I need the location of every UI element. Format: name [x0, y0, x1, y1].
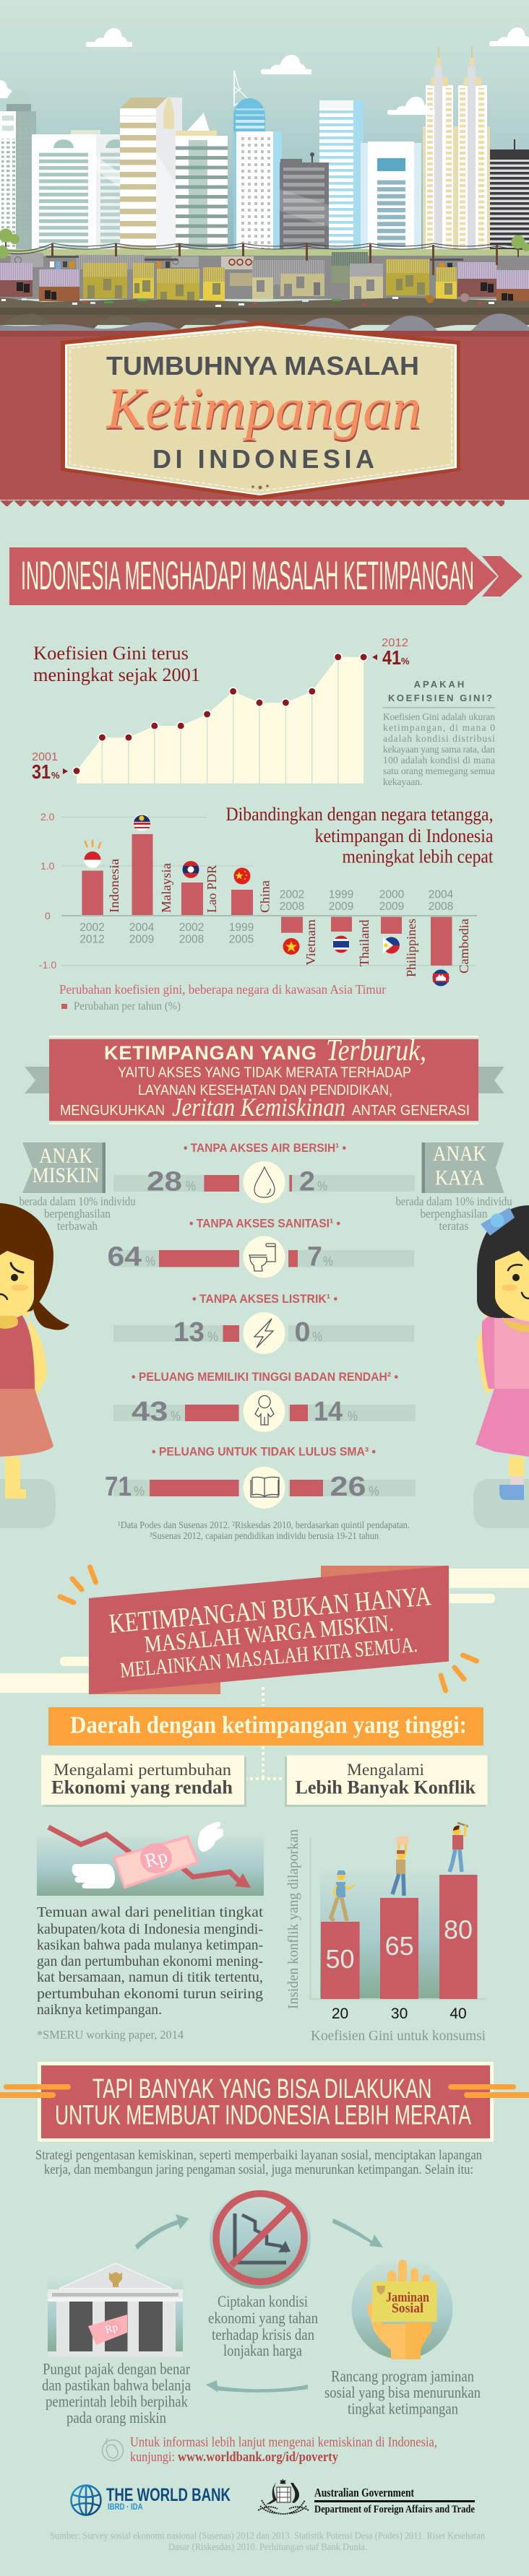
country labels: Philippines — [404, 919, 418, 977]
illustration: flying rupiah note over falling trend — [37, 1822, 264, 1896]
bar values: 65 — [385, 1931, 414, 1961]
icon: crisis prevention sign — [210, 2187, 311, 2289]
year labels: 2002 — [280, 888, 304, 901]
text: pungut pajak: dan pastikan bahwa belanja — [42, 2376, 191, 2394]
chart heading: Gini: Koefisien Gini terus — [33, 643, 189, 664]
building: dark tower — [490, 139, 529, 250]
sources — [50, 2531, 485, 2553]
paragraph: temuan awal: kasikan bahwa pada mulanya ketimpan- — [37, 1937, 263, 1953]
section banner: ketimpangan yang terburuk: LAYANAN KESEHATAN DAN PENDIDIKAN, — [138, 1083, 392, 1098]
ground shadow under left girl — [0, 1479, 56, 1528]
building: cream twin towers — [423, 47, 490, 250]
label: anak miskin: ANAK — [39, 1144, 93, 1168]
flag: China — [234, 868, 250, 884]
crest — [258, 2479, 309, 2514]
paragraph: temuan awal: gan dan pertumbuhan ekonomi mening- — [37, 1953, 263, 1969]
row: tanpa akses sanitasi: • TANPA AKSES SANITASI¹ • — [189, 1216, 340, 1231]
bar chart heading: ketimpangan di Indonesia — [315, 825, 494, 846]
character: poor child — [0, 1203, 69, 1499]
icon: government building collecting tax: Rp — [104, 2322, 119, 2336]
axis: 1.0 — [40, 860, 55, 872]
tilted banner: masalah kita semua: MASALAH WARGA MISKIN. — [143, 1610, 395, 1658]
x tick labels: 40 — [450, 2005, 467, 2022]
section banner: ketimpangan yang terburuk: Jeritan Kemiskinan — [172, 1093, 345, 1122]
row: peluang tinggi badan rendah: • PELUANG MEMILIKI TINGGI BADAN RENDAH² • — [132, 1370, 398, 1384]
paragraph: temuan awal: kabupaten/kota di Indonesia mengindi- — [37, 1921, 263, 1937]
year labels: 2008 — [179, 933, 204, 946]
flag: Malaysia — [134, 815, 150, 831]
dotted connector — [244, 1687, 287, 1779]
section banner: ketimpangan yang terburuk: Terburuk, — [326, 1034, 426, 1067]
y axis label: Insiden konflik yang dilaporkan — [285, 1829, 301, 2009]
logo: the world bank: THE WORLD BANK — [106, 2485, 231, 2505]
shack: gray two — [280, 260, 324, 296]
row: peluang tinggi badan rendah: % — [171, 1409, 181, 1423]
explainer: apakah koefisien gini: 100 adalah kondisi di mana — [383, 755, 495, 766]
section banner: ketimpangan yang terburuk: KETIMPANGAN YANG — [104, 1042, 317, 1064]
label: anak kaya: ANAK — [433, 1142, 486, 1166]
year labels: 2004 — [129, 921, 155, 934]
label 2001 — [32, 751, 68, 783]
row: peluang tidak lulus SMA — [105, 1445, 416, 1509]
illustration: flying rupiah note over falling trend: Rp — [142, 1845, 170, 1872]
shack: purple second — [39, 269, 79, 301]
tilted banner: masalah kita semua — [0, 1566, 529, 1694]
poles and wires — [0, 243, 529, 275]
country labels: Lao PDR — [205, 865, 219, 913]
note: anak kaya: berpenghasilan — [421, 1207, 488, 1220]
year labels — [79, 888, 454, 946]
cycle arrow: to centre — [135, 2214, 189, 2250]
axis: -1.0 — [39, 959, 56, 971]
flag: Indonesia — [84, 841, 101, 868]
bar chart: change of gini by country — [39, 811, 477, 986]
link text: more information — [130, 2435, 437, 2465]
figure: box carrier — [392, 1836, 408, 1896]
panel: lebih banyak konflik heading: Lebih Banyak Konflik — [295, 1777, 476, 1798]
back shacks — [230, 260, 382, 286]
cloud 2 — [260, 55, 313, 74]
bar values — [325, 1915, 473, 1974]
paragraph: temuan awal: naiknya ketimpangan. — [37, 2002, 162, 2018]
explainer: apakah koefisien gini: kekayaan. — [383, 776, 422, 787]
year labels: 2002 — [179, 921, 204, 934]
section banner: ketimpangan yang terburuk: MENGUKUHKAN — [60, 1103, 165, 1119]
panel: ekonomi yang rendah heading: Ekonomi yang rendah — [51, 1777, 233, 1798]
area chart: Gini coefficient 2001-2012 — [32, 637, 410, 784]
text: ciptakan kondisi: Ciptakan kondisi — [218, 2292, 308, 2310]
shack: olive right — [386, 259, 429, 295]
cycle arrow: to left — [206, 2380, 308, 2393]
text: rancang program: Rancang program jaminan — [331, 2367, 474, 2385]
title script word: Ketimpangan — [106, 377, 421, 441]
cloud 4 — [0, 80, 18, 98]
explainer: apakah koefisien gini: APAKAH — [414, 679, 466, 690]
panel: lebih banyak konflik heading — [285, 1755, 487, 1807]
icon: open book — [251, 1477, 279, 1497]
icon: hand with social security card: Sosial — [392, 2301, 423, 2316]
row: tanpa akses sanitasi: % — [323, 1254, 333, 1269]
paragraph: strategi: kerja, dan membangun jaring pengaman sosial, juga menurunkan ketimpangan. Selain itu: — [44, 2162, 473, 2177]
icon: hand with social security card — [351, 2258, 452, 2359]
figure: stick raiser — [450, 1823, 468, 1872]
ground shadow under right girl — [473, 1479, 529, 1528]
label 2012: 2012 — [382, 637, 408, 649]
text: ciptakan kondisi: terhadap krisis dan — [212, 2325, 314, 2343]
sources: Dasar (Riskesdas) 2010. Perhitungan staf Bank Dunia. — [168, 2542, 367, 2553]
explainer: apakah koefisien gini: adalah kondisi distribusi — [383, 733, 495, 744]
country labels — [107, 859, 471, 977]
year labels: 2009 — [379, 901, 404, 913]
shack: purple right one — [457, 262, 496, 297]
panel: ekonomi yang rendah heading — [41, 1755, 246, 1807]
note: anak kaya — [396, 1194, 512, 1233]
label 2001: 31 — [32, 760, 51, 783]
footnote: ³Susenas 2012, capaian pendidikan individu berusia 19-21 tahun — [150, 1530, 379, 1541]
row: tanpa akses sanitasi: 7 — [307, 1242, 322, 1272]
label 2001: 2001 — [32, 751, 58, 763]
explainer: apakah koefisien gini: kekayaan yang sama rata, dan — [383, 744, 495, 755]
year labels: 2005 — [229, 933, 254, 946]
sources: Sumber: Survey sosial ekonomi nasional (Susenas) 2012 dan 2013. Statistik Potensi Desa (Podes) 2011. Riset Kesehatan — [50, 2531, 485, 2542]
flag: Laos — [182, 861, 199, 878]
cloud 5 — [387, 97, 436, 115]
explainer: apakah koefisien gini: ketimpangan, di mana 0 — [383, 722, 495, 733]
logo: australian government: Department of Foreign Affairs and Trade — [314, 2504, 475, 2515]
shack: yellow two — [133, 263, 154, 298]
title ribbon background — [0, 331, 529, 506]
bar values: 80 — [444, 1915, 473, 1944]
row: tanpa akses sanitasi: 64 — [107, 1242, 142, 1272]
ground and river — [0, 298, 529, 337]
row: tanpa akses air bersih — [113, 1141, 415, 1203]
row: tanpa akses air bersih: 28 — [147, 1166, 182, 1197]
cloud 3 — [489, 27, 529, 46]
row: tanpa akses air bersih: % — [186, 1179, 196, 1193]
row: peluang tinggi badan rendah: 14 — [314, 1397, 343, 1427]
shack: gray one — [252, 264, 273, 299]
text: rancang program — [324, 2367, 481, 2417]
x tick labels — [332, 2005, 467, 2022]
row: peluang tinggi badan rendah: % — [348, 1409, 358, 1423]
shack: purple right two — [496, 270, 529, 305]
paragraph: temuan awal: pertumbuhan ekonomi turun seiring — [37, 1986, 263, 2002]
panel: ekonomi yang rendah heading: Mengalami pertumbuhan — [53, 1761, 232, 1779]
section banner: ketimpangan yang terburuk: YAITU AKSES YANG TIDAK MERATA TERHADAP — [118, 1064, 411, 1080]
label 2001: % — [51, 770, 60, 781]
label: anak miskin — [22, 1142, 106, 1193]
icon: water drop — [254, 1167, 275, 1197]
icon: lightning — [254, 1319, 273, 1348]
bar chart legend: Perubahan per tahun (%) — [74, 1000, 181, 1012]
panel: lebih banyak konflik heading: Mengalami — [347, 1761, 424, 1779]
note: anak miskin: berada dalam 10% individu — [19, 1194, 136, 1208]
section banner: ketimpangan yang terburuk: ANTAR GENERASI — [352, 1103, 470, 1119]
row: tanpa akses listrik — [113, 1292, 414, 1354]
text: rancang program: tingkat ketimpangan — [348, 2399, 458, 2417]
tilted banner: masalah kita semua: KETIMPANGAN BUKAN HANYA — [108, 1581, 433, 1639]
flag: Thailand — [332, 936, 350, 953]
country labels: China — [257, 880, 272, 913]
label 2012: 41 — [382, 646, 401, 669]
section banner: ketimpangan yang terburuk — [25, 1034, 504, 1124]
callout heading: daerah dengan ketimpangan yang tinggi — [48, 1707, 483, 1745]
row: peluang tinggi badan rendah — [113, 1370, 416, 1432]
row: peluang tidak lulus SMA: 71 — [105, 1472, 132, 1502]
trees — [0, 228, 529, 259]
source note: SMERU: *SMERU working paper, 2014 — [37, 2028, 184, 2042]
badge dots — [251, 485, 269, 490]
flag: Vietnam — [283, 938, 299, 955]
character: rich child — [476, 1205, 529, 1500]
figure: walker — [331, 1870, 355, 1921]
cycle arrow: to right — [332, 2219, 383, 2247]
row: tanpa akses listrik: 13 — [173, 1317, 205, 1348]
year labels: 2000 — [379, 888, 405, 901]
row: peluang tidak lulus SMA: 26 — [330, 1472, 366, 1502]
text: pungut pajak — [42, 2360, 191, 2427]
cloud 1 — [85, 28, 133, 47]
row: tanpa akses sanitasi: % — [145, 1254, 155, 1269]
shack: yellow four — [203, 267, 225, 303]
text: ciptakan kondisi — [208, 2292, 318, 2359]
shack: yellow right — [436, 267, 457, 303]
row: peluang tidak lulus SMA: • PELUANG UNTUK TIDAK LULUS SMA³ • — [152, 1445, 376, 1459]
row: peluang tinggi badan rendah: 43 — [132, 1397, 168, 1427]
row: tanpa akses listrik: % — [207, 1330, 218, 1344]
logo: the world bank: IBRD · IDA — [108, 2502, 143, 2512]
row: tanpa akses listrik: • TANPA AKSES LISTRIK¹ • — [192, 1292, 337, 1306]
title script shadow: Ketimpangan — [106, 379, 422, 443]
note: anak miskin — [19, 1194, 136, 1233]
axis: 0 — [45, 910, 51, 921]
text: ciptakan kondisi: lonjakan harga — [223, 2341, 302, 2359]
chart heading: Gini — [33, 643, 200, 685]
country labels: Cambodia — [457, 919, 471, 973]
row: tanpa akses sanitasi — [107, 1216, 414, 1278]
x tick labels: 20 — [332, 2005, 348, 2022]
section banner: tapi banyak yang bisa dilakukan — [0, 2062, 529, 2142]
bar chart heading — [225, 804, 494, 867]
row: peluang tidak lulus SMA: % — [369, 1484, 379, 1499]
bar chart heading: Dibandingkan dengan negara tetangga, — [225, 804, 493, 825]
note: anak kaya: berada dalam 10% individu — [396, 1194, 512, 1208]
link text: more information: www.worldbank.org/id/poverty — [178, 2450, 338, 2465]
year labels: 2008 — [429, 901, 453, 913]
country labels: Thailand — [357, 920, 371, 966]
shack: olive one — [83, 263, 127, 298]
bars — [82, 834, 452, 966]
text: rancang program: sosial yang bisa menurunkan — [324, 2383, 481, 2401]
note: anak kaya: teratas — [439, 1219, 468, 1233]
logo: australian government: Australian Government — [314, 2486, 414, 2499]
building: gray office block — [280, 152, 329, 250]
year labels: 2012 — [79, 933, 105, 946]
chart heading: Gini: meningkat sejak 2001 — [33, 664, 200, 685]
explainer: apakah koefisien gini: Koefisien Gini adalah ukuran — [383, 711, 495, 722]
year labels: 2009 — [129, 933, 154, 946]
bar chart: conflict incidents by gini — [285, 1823, 487, 2044]
title badge — [61, 321, 460, 499]
x tick labels: 30 — [391, 2005, 408, 2022]
label 2012: % — [401, 656, 410, 667]
bar chart heading: meningkat lebih cepat — [343, 846, 494, 867]
footnote: ¹Data Podes dan Susenas 2012. ²Riskesdas 2010, berdasarkan quintil pendapatan. — [118, 1519, 410, 1530]
shack: olive three — [157, 269, 199, 305]
building: tan striped tower — [120, 97, 182, 250]
tilted banner: masalah kita semua: MELAINKAN MASALAH KITA SEMUA. — [119, 1633, 418, 1683]
label: anak miskin: MISKIN — [32, 1163, 100, 1187]
building: wide white block — [32, 130, 135, 250]
building: white and blue block — [361, 142, 421, 250]
label 2012 — [372, 637, 410, 669]
paragraph: temuan awal — [37, 1904, 263, 2018]
country labels: Malaysia — [159, 863, 173, 913]
icon: government building collecting tax — [48, 2263, 183, 2357]
x axis label: Koefisien Gini untuk konsumsi — [311, 2028, 486, 2044]
shack: purple left — [0, 263, 33, 297]
country labels: Vietnam — [304, 919, 318, 966]
year labels: 2008 — [280, 901, 304, 913]
explainer: apakah koefisien gini: KOEFISIEN GINI? — [388, 693, 492, 703]
paragraph: temuan awal: kat bersamaan, namun di titik tertentu, — [37, 1969, 263, 1985]
year labels: 1999 — [229, 921, 254, 934]
bars — [321, 1875, 477, 1999]
icon: toilet — [249, 1244, 275, 1271]
icon: child figure — [255, 1395, 274, 1425]
link text: more information: kunjungi: — [130, 2450, 175, 2465]
country labels: Indonesia — [107, 859, 121, 913]
title line 3: DI INDONESIA — [152, 444, 374, 474]
year labels: 1999 — [329, 888, 353, 901]
icon: mouse pointer — [103, 2438, 123, 2461]
flag: Philippines — [383, 937, 400, 953]
row: tanpa akses listrik: 0 — [295, 1317, 311, 1348]
building: blue dome tower — [233, 71, 282, 250]
label: anak kaya — [422, 1142, 504, 1193]
row: tanpa akses air bersih: % — [317, 1179, 327, 1193]
paragraph: strategi — [35, 2148, 482, 2177]
building: left tower with dome — [0, 90, 36, 250]
label: anak kaya: KAYA — [435, 1166, 484, 1190]
building: blue striped tall tower — [319, 100, 364, 250]
icon: hand with social security card: Jaminan — [386, 2290, 429, 2305]
row: tanpa akses listrik: % — [312, 1330, 322, 1344]
bar values: 50 — [325, 1944, 355, 1974]
callout heading: daerah dengan ketimpangan yang tinggi: Daerah dengan ketimpangan yang tinggi: — [70, 1712, 467, 1739]
burst strokes — [60, 1567, 477, 1691]
title line 1: TUMBUHNYA MASALAH — [106, 351, 419, 381]
axis — [39, 811, 477, 971]
bar chart caption: Perubahan koefisien gini, beberapa negara di kawasan Asia Timur — [59, 982, 386, 997]
year labels: 2002 — [79, 921, 105, 934]
text: pungut pajak: pada orang miskin — [66, 2408, 166, 2427]
explainer: apakah koefisien gini — [383, 679, 495, 787]
note: anak miskin: berpenghasilan — [44, 1207, 111, 1220]
shack: gray three — [350, 264, 383, 299]
text: pungut pajak: pemerintah lebih berpihak — [46, 2393, 188, 2411]
building: green striped block — [176, 113, 228, 250]
litter — [1, 293, 494, 307]
logo: australian government — [258, 2479, 475, 2515]
year labels: 2009 — [329, 901, 353, 913]
year labels: 2004 — [429, 888, 454, 901]
note: anak miskin: terbawah — [57, 1219, 98, 1233]
header illustration: city skyline and slum — [0, 0, 529, 337]
logo: the world bank — [71, 2485, 231, 2515]
text: pungut pajak: Pungut pajak dengan benar — [43, 2360, 191, 2377]
row: peluang tidak lulus SMA: % — [134, 1484, 145, 1499]
text: ciptakan kondisi: ekonomi yang tahan — [208, 2309, 318, 2327]
row: tanpa akses air bersih: • TANPA AKSES AIR BERSIH¹ • — [184, 1141, 346, 1155]
row: tanpa akses air bersih: 2 — [299, 1166, 315, 1197]
paragraph: temuan awal: Temuan awal dari penelitian tingkat — [37, 1904, 263, 1920]
flag: Cambodia — [432, 969, 450, 986]
explainer: apakah koefisien gini: satu orang memegang semua — [383, 766, 495, 776]
axis: 2.0 — [40, 811, 55, 823]
footnote — [118, 1519, 410, 1541]
link text: more information: Untuk informasi lebih lanjut mengenai kemiskinan di Indonesia, — [130, 2435, 437, 2450]
slum strip — [0, 228, 529, 337]
